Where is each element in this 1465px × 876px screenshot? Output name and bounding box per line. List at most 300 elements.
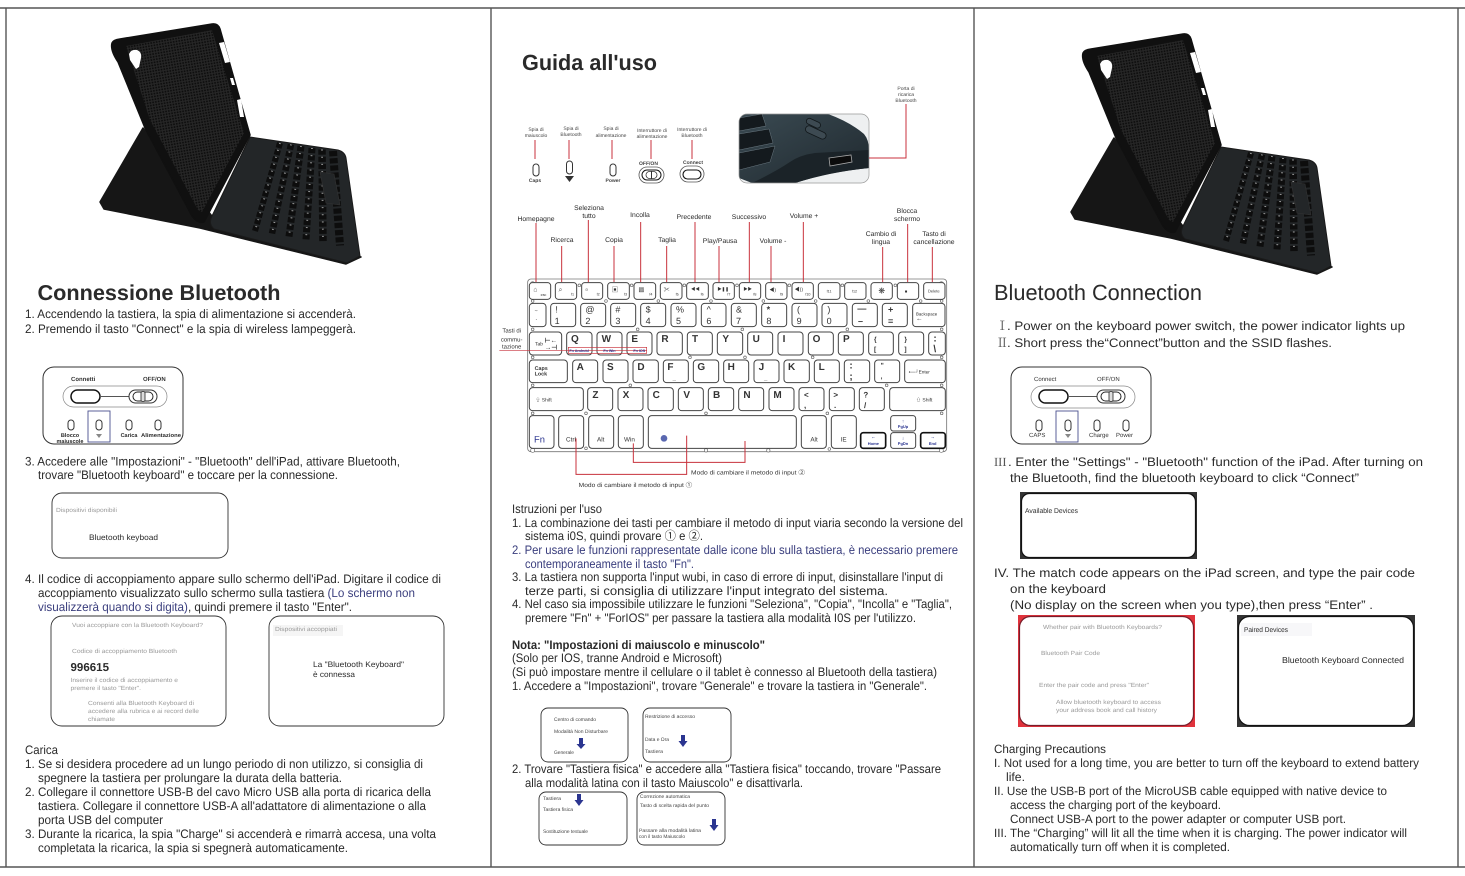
keyboard: input-switching labels: Tasti di bbox=[502, 327, 521, 334]
diagram: keyboard indicator panel: OFF/ON bbox=[1097, 376, 1120, 383]
keyboard: input method callouts: Modo di cambiare il metodo di input ② bbox=[691, 469, 805, 476]
charging instructions bbox=[25, 743, 436, 855]
keyboard diagram: * bbox=[767, 305, 770, 315]
keyboard diagram: IE bbox=[841, 436, 847, 443]
usage instructions: contemporaneamente il tasto "Fn". bbox=[525, 557, 694, 571]
screen: paired devices: è connessa bbox=[313, 670, 356, 679]
screen: physical keyboard: Tastiera bbox=[543, 796, 561, 802]
diagram: keyboard indicator panel: Blocco bbox=[61, 433, 80, 439]
keyboard diagram: [ bbox=[874, 346, 876, 353]
step 2 text: 2. Trovare "Tastiera fisica" e accedere alla "Tastiera fisica" toccando, trovare "Passare bbox=[512, 762, 941, 776]
function key callouts: Homepagne bbox=[517, 216, 555, 223]
keyboard diagram: & bbox=[736, 305, 742, 315]
keyboard diagram: ❋ bbox=[878, 286, 885, 295]
indicator: Bluetooth light: Bluetooth bbox=[560, 132, 582, 138]
step 2 text: alla modalità latina con il tasto Maiuscolo" e disattivarla. bbox=[525, 776, 803, 790]
indicator: power light bbox=[596, 126, 627, 184]
screen: pairing code: premere il tasto "Enter". bbox=[70, 685, 141, 692]
step III: the Bluetooth, find the bluetooth keyboard to click “Connect” bbox=[1010, 471, 1359, 485]
steps I and II bbox=[996, 319, 1405, 350]
keyboard diagram: ↓ bbox=[902, 435, 904, 440]
indicator: power switch: Interruttore di bbox=[637, 128, 667, 134]
keyboard diagram: End bbox=[929, 441, 936, 446]
keyboard diagram: ) bbox=[827, 305, 830, 315]
keyboard diagram: ! bbox=[555, 305, 558, 315]
keyboard diagram: Caps bbox=[535, 366, 548, 371]
note: uppercase and lowercase settings bbox=[512, 638, 937, 693]
charging precautions bbox=[994, 742, 1419, 854]
indicator: Bluetooth light bbox=[560, 126, 582, 182]
keyboard diagram: 1 bbox=[555, 316, 560, 326]
heading: Bluetooth Connection: Bluetooth Connection bbox=[994, 280, 1202, 305]
keyboard diagram: Q bbox=[571, 333, 579, 344]
panel: English Bluetooth connection bbox=[994, 34, 1423, 854]
function key callouts bbox=[517, 205, 955, 246]
charging instructions: 1. Se si desidera procedere ad un lungo periodo di non utilizzo, si consiglia di bbox=[25, 757, 423, 771]
keyboard diagram: f9 bbox=[780, 292, 783, 296]
keyboard diagram: → bbox=[930, 434, 935, 439]
keyboard diagram: A bbox=[577, 361, 584, 372]
keyboard diagram: > bbox=[833, 390, 838, 399]
callout: charging port: ricarica bbox=[898, 92, 914, 98]
keyboard diagram: / bbox=[864, 401, 866, 410]
keyboard diagram: Lock bbox=[535, 371, 547, 377]
keyboard: input-switching labels bbox=[499, 327, 647, 353]
function key callouts: cancellazione bbox=[913, 239, 955, 246]
keyboard diagram: f3 bbox=[624, 292, 627, 296]
keyboard: function row bbox=[529, 283, 945, 299]
keyboard diagram: ▫ bbox=[585, 285, 588, 294]
keyboard diagram: { bbox=[874, 336, 877, 343]
product photo: tablet keyboard case bbox=[1071, 34, 1332, 274]
usage instructions: 3. La tastiera non supporta l'input wubi, in caso di errore di input, disinstallare l'input di bbox=[512, 570, 943, 584]
keyboard diagram: L bbox=[819, 361, 825, 372]
charging precautions: access the charging port of the keyboard. bbox=[1010, 798, 1221, 812]
keyboard diagram: R bbox=[661, 333, 669, 344]
charging instructions: 2. Collegare il connettore USB-B del cavo Micro USB alla porta di ricarica della bbox=[25, 785, 431, 799]
keyboard diagram: Ctrl bbox=[566, 436, 576, 443]
function key callouts: Play/Pausa bbox=[703, 238, 737, 245]
screen: available devices: Available Devices bbox=[1025, 507, 1078, 515]
keyboard diagram: < bbox=[804, 390, 809, 399]
keyboard diagram: " bbox=[881, 362, 884, 369]
keyboard diagram: ; bbox=[849, 371, 853, 382]
charging precautions: automatically turn off when it is completed. bbox=[1010, 840, 1230, 854]
screen: physical keyboard bbox=[539, 792, 627, 845]
note: uppercase and lowercase settings: (Solo per IOS, tranne Android e Microsoft) bbox=[512, 651, 722, 665]
screen: restrictions settings: Tastiera bbox=[645, 749, 663, 755]
charging precautions: III. The “Charging” will lit all the time when it is charging. The power indicator will bbox=[994, 826, 1407, 840]
keyboard diagram: ⌂ bbox=[533, 286, 537, 293]
keyboard diagram: f11 bbox=[827, 289, 831, 293]
keyboard diagram: X bbox=[623, 389, 629, 400]
screen: paired devices: La "Bluetooth Keyboard" bbox=[313, 660, 404, 669]
screen: pairing code: chiamate bbox=[88, 716, 116, 723]
function key callouts: lingua bbox=[872, 239, 890, 246]
screen: pairing code: Inserire il codice di accoppiamento e bbox=[70, 677, 179, 684]
keyboard diagram: : bbox=[849, 360, 853, 371]
product photo: tablet keyboard case bbox=[100, 24, 361, 264]
indicator: Bluetooth switch: Interruttore di bbox=[677, 127, 707, 133]
keyboard diagram: @ bbox=[585, 305, 594, 315]
keyboard diagram: = bbox=[888, 316, 893, 326]
screen: latin mode setting: con il tasto Maiuscolo bbox=[639, 834, 685, 840]
step 4: accoppiamento visualizzato sullo schermo sulla tastiera (Lo schermo non bbox=[38, 586, 415, 600]
keyboard: input-switching labels: Fn Win bbox=[603, 349, 616, 353]
keyboard diagram: } bbox=[904, 336, 907, 343]
function key leader lines bbox=[536, 220, 932, 282]
keyboard: bottom row bbox=[529, 416, 945, 448]
indicator: Bluetooth switch: Connect bbox=[683, 160, 703, 166]
charging precautions: I. Not used for a long time, you are better to turn off the keyboard to extend battery bbox=[994, 756, 1419, 770]
keyboard diagram: f4 bbox=[649, 292, 652, 296]
step 3 bbox=[25, 454, 400, 482]
screen: restrictions settings bbox=[643, 708, 731, 762]
keyboard diagram: ^ bbox=[707, 305, 711, 315]
usage instructions bbox=[512, 502, 963, 625]
keyboard diagram: Backspace bbox=[916, 311, 937, 316]
callout: charging port: Porta di bbox=[897, 86, 915, 92]
screen: latin mode setting bbox=[637, 792, 725, 845]
screen: paired devices: Bluetooth Keyboard Connected bbox=[1282, 655, 1404, 665]
keyboard: number row bbox=[529, 303, 945, 327]
keyboard diagram: Z bbox=[592, 389, 598, 400]
keyboard diagram: _ bbox=[672, 375, 676, 381]
function key callouts: Volume - bbox=[760, 238, 786, 245]
keyboard diagram: ▶▶ bbox=[743, 287, 752, 292]
charging instructions: tastiera. Collegare il connettore USB-A all'adattatore di alimentazione o alla bbox=[38, 799, 426, 813]
keyboard diagram: W bbox=[602, 333, 611, 344]
diagram: keyboard indicator panel: Charge bbox=[1089, 432, 1109, 439]
screen: pairing code: Codice di accoppiamento Bluetooth bbox=[72, 648, 177, 655]
screen: latin mode setting: Passare alla modalità latina bbox=[639, 828, 701, 834]
step III: III bbox=[994, 455, 1006, 469]
keyboard diagram: J bbox=[759, 361, 764, 372]
keyboard diagram: Delete bbox=[928, 289, 940, 293]
screen: paired devices bbox=[1237, 615, 1415, 727]
keyboard diagram: 4 bbox=[646, 316, 651, 326]
function key callouts: schermo bbox=[894, 216, 920, 223]
keyboard diagram: . bbox=[834, 401, 836, 410]
charging instructions: Carica bbox=[25, 743, 58, 757]
keyboard diagram: ] bbox=[904, 346, 907, 353]
keyboard diagram: V bbox=[683, 389, 690, 400]
keyboard diagram: 2 bbox=[585, 316, 590, 326]
keyboard diagram bbox=[499, 220, 947, 488]
keyboard: input-switching labels: tazione bbox=[502, 343, 521, 350]
keyboard diagram: + bbox=[888, 305, 893, 315]
screen: general settings: Modalità Non Disturbare bbox=[554, 729, 608, 735]
screen: available devices bbox=[52, 493, 228, 558]
steps 1 and 2: 2. Premendo il tasto "Connect" e la spia di wireless lampeggerà. bbox=[25, 322, 356, 336]
indicator: caps light: maiuscolo bbox=[525, 133, 547, 139]
step 4: visualizzerà quando si digita), quindi premere il tasto "Enter". bbox=[38, 600, 352, 614]
steps I and II: Ⅱ bbox=[996, 336, 1009, 350]
function key callouts: Seleziona bbox=[574, 205, 604, 212]
callout: charging port bbox=[869, 86, 917, 158]
steps I and II: . Short press the“Connect”button and the SSID flashes. bbox=[1007, 336, 1332, 350]
screen: general settings: Centro di comando bbox=[554, 717, 596, 723]
keyboard diagram: ◀◀ bbox=[691, 287, 700, 292]
keyboard diagram: O bbox=[813, 333, 820, 344]
keyboard diagram: 3 bbox=[615, 316, 620, 326]
keyboard diagram: D bbox=[637, 361, 645, 372]
function key callouts: Blocca bbox=[897, 208, 917, 215]
keyboard: input-switching labels: Fn IOS bbox=[633, 349, 645, 353]
keyboard: input method callouts bbox=[576, 436, 805, 488]
photo: charging port close-up bbox=[739, 114, 869, 183]
usage instructions: sistema i0S, quindi provare ① e ②. bbox=[525, 529, 703, 543]
keyboard diagram: Win bbox=[624, 436, 635, 443]
keyboard diagram: Alt bbox=[810, 436, 818, 443]
diagram: keyboard indicator panel bbox=[1011, 367, 1151, 444]
keyboard diagram: 9 bbox=[797, 316, 802, 326]
keyboard diagram: $ bbox=[646, 305, 651, 315]
keyboard diagram: % bbox=[676, 305, 684, 315]
screen: paired devices: Dispositivi accoppiati bbox=[275, 626, 337, 633]
keyboard diagram: f2 bbox=[597, 292, 600, 296]
keyboard diagram: ▩ bbox=[638, 287, 644, 293]
screen: restrictions settings: Restrizione di accesso bbox=[645, 714, 695, 720]
screen: pair code: Whether pair with Bluetooth Keyboards? bbox=[1043, 624, 1163, 631]
keyboard diagram: H bbox=[728, 361, 735, 372]
keyboard diagram: G bbox=[697, 361, 705, 372]
keyboard diagram: ◀)) bbox=[795, 287, 803, 292]
keyboard diagram: ⊢← bbox=[545, 337, 557, 344]
steps 1 and 2 bbox=[25, 307, 356, 336]
screen: available devices: Bluetooth keyboad bbox=[89, 533, 158, 542]
note: uppercase and lowercase settings: Nota: "Impostazioni di maiuscolo e minuscolo" bbox=[512, 638, 765, 652]
keyboard: QWERTY row bbox=[529, 332, 945, 355]
keyboard diagram: # bbox=[615, 305, 620, 315]
diagram: keyboard indicator panel: OFF/ON bbox=[143, 376, 166, 383]
screen: pairing code bbox=[51, 616, 226, 726]
screen: pairing code: accedere alla rubrica e ai record delle bbox=[88, 708, 200, 715]
keyboard diagram: 6 bbox=[706, 316, 711, 326]
keyboard diagram: ⟵┘Enter bbox=[909, 369, 930, 374]
function key callouts: Cambio di bbox=[866, 231, 897, 238]
keyboard diagram: E bbox=[631, 333, 638, 344]
note: uppercase and lowercase settings: (Si può impostare mentre il cellulare o il tablet è connesso al Bluetooth della tastiera) bbox=[512, 665, 937, 679]
charging instructions: completata la ricarica, la spia si spegnerà automaticamente. bbox=[38, 841, 348, 855]
function key callouts: Precedente bbox=[677, 214, 712, 221]
indicator: Bluetooth switch: Bluetooth bbox=[681, 133, 703, 139]
screen: pair code: Bluetooth Pair Code bbox=[1041, 650, 1101, 657]
function key callouts: Taglia bbox=[658, 237, 676, 244]
indicator: power switch bbox=[637, 128, 668, 183]
screen: latin mode setting: Tasto di scelta rapida del punto bbox=[640, 803, 709, 809]
screen: pairing code: Consenti alla Bluetooth Keyboard di bbox=[88, 700, 194, 707]
keyboard diagram: P bbox=[843, 333, 850, 344]
diagram: keyboard indicator panel: maiuscole bbox=[57, 439, 83, 445]
keyboard diagram: _ bbox=[764, 375, 768, 381]
keyboard diagram: Home bbox=[868, 441, 879, 446]
keyboard diagram: ~ bbox=[535, 308, 538, 314]
keyboard diagram: ? bbox=[863, 390, 868, 399]
step IV bbox=[994, 566, 1415, 612]
indicator: Bluetooth light: Spia di bbox=[563, 126, 579, 132]
keyboard diagram: Fn bbox=[534, 434, 545, 444]
screen: pair code: Allow bluetooth keyboard to access bbox=[1056, 699, 1161, 706]
charging instructions: spegnere la tastiera per prolungare la durata della batteria. bbox=[38, 771, 342, 785]
screen: physical keyboard: Tastiera fisica bbox=[543, 807, 573, 813]
step 2 text bbox=[512, 762, 941, 790]
usage instructions: premere "Fn" + "ForIOS" per passare la tastiera alla modalità I0S per l'utilizzo. bbox=[525, 611, 916, 625]
keyboard diagram: — bbox=[857, 304, 866, 314]
keyboard diagram: ← bbox=[916, 315, 923, 322]
function key callouts: Volume + bbox=[790, 213, 818, 220]
keyboard diagram: , bbox=[881, 373, 883, 380]
keyboard diagram: ▣ bbox=[612, 286, 618, 294]
keyboard diagram: ▶❚❚ bbox=[717, 287, 729, 292]
steps 1 and 2: 1. Accendendo la tastiera, la spia di alimentazione si accenderà. bbox=[25, 307, 356, 321]
steps I and II: Ⅰ bbox=[996, 319, 1009, 333]
steps I and II: . Power on the keyboard power switch, the power indicator lights up bbox=[1007, 319, 1405, 333]
charging instructions: 3. Durante la ricarica, la spia "Charge" si accenderà e rimarrà accesa, una volta bbox=[25, 827, 436, 841]
keyboard diagram: ⇧ Shift bbox=[535, 397, 552, 403]
indicator: Bluetooth switch bbox=[677, 127, 707, 182]
keyboard diagram: Tab bbox=[535, 341, 543, 347]
keyboard diagram: f5 bbox=[676, 292, 679, 296]
keyboard diagram: PgUp bbox=[898, 424, 908, 429]
keyboard diagram: 5 bbox=[676, 316, 681, 326]
screen: paired devices: Paired Devices bbox=[1244, 626, 1288, 634]
keyboard diagram: f12 bbox=[852, 289, 857, 293]
keyboard diagram: f8 bbox=[753, 292, 756, 296]
keyboard diagram: PgDn bbox=[898, 441, 908, 446]
diagram: keyboard indicator panel: CAPS bbox=[1029, 432, 1045, 439]
step 3: trovare "Bluetooth keyboard" e toccare per la connessione. bbox=[38, 468, 338, 482]
screen: pairing code: 996615 bbox=[70, 662, 110, 674]
keyboard diagram: Alt bbox=[597, 436, 605, 443]
screen: available devices bbox=[1020, 492, 1197, 559]
note: uppercase and lowercase settings: 1. Accedere a "Impostazioni", trovare "Generale" e trovare la tastiera in "Generale". bbox=[512, 679, 927, 693]
charging precautions: life. bbox=[1006, 770, 1025, 784]
screen: pair code: Enter the pair code and press "Enter" bbox=[1039, 682, 1149, 689]
keyboard diagram: Y bbox=[722, 333, 729, 344]
keyboard diagram: M bbox=[773, 389, 782, 400]
screen: general settings bbox=[541, 708, 628, 762]
keyboard diagram: T bbox=[692, 333, 698, 344]
keyboard diagram: ← bbox=[871, 434, 876, 439]
keyboard diagram: U bbox=[753, 333, 760, 344]
keyboard diagram: : bbox=[933, 333, 937, 344]
keyboard diagram: S bbox=[607, 361, 614, 372]
keyboard diagram: C bbox=[653, 389, 660, 400]
indicator: caps light: Spia di bbox=[528, 127, 544, 133]
function key callouts: Tasto di bbox=[922, 231, 946, 238]
usage instructions: terze parti, si consiglia di utilizzare l'input integrato del sistema. bbox=[525, 584, 888, 598]
step 4: 4. Il codice di accoppiamento appare sullo schermo dell'iPad. Digitare il codice di bbox=[25, 572, 441, 586]
step 4 bbox=[25, 572, 441, 614]
indicator: power light: Power bbox=[605, 178, 621, 184]
indicator: caps light bbox=[525, 127, 547, 184]
keyboard: ASDF row bbox=[529, 360, 945, 383]
keyboard diagram: ▪ bbox=[905, 287, 908, 296]
screen: pairing code: Vuoi accoppiare con la Bluetooth Keyboard? bbox=[72, 622, 204, 629]
keyboard diagram: esc bbox=[541, 293, 547, 297]
usage instructions: 1. La combinazione dei tasti per cambiare il metodo di input viaria secondo la versione del bbox=[512, 516, 963, 530]
keyboard diagram: – bbox=[858, 316, 863, 326]
panel: Italian Bluetooth connection bbox=[25, 24, 444, 855]
charging precautions: Charging Precautions bbox=[994, 742, 1106, 756]
indicator: power switch: OFF/ON bbox=[639, 161, 658, 167]
indicator: power switch: alimentazione bbox=[637, 134, 668, 140]
indicator: caps light: Caps bbox=[529, 178, 541, 184]
keyboard diagram: F bbox=[667, 361, 673, 372]
keyboard diagram: f7 bbox=[727, 292, 730, 296]
screen: pair code bbox=[1018, 615, 1195, 727]
keyboard diagram: ✂ bbox=[664, 286, 670, 293]
diagram: keyboard indicator panel: Carica bbox=[121, 433, 138, 439]
heading: Guida all'uso: Guida all'uso bbox=[522, 50, 657, 75]
diagram: keyboard indicator panel bbox=[43, 367, 183, 445]
function key callouts: Copia bbox=[605, 237, 623, 244]
keyboard diagram: I bbox=[783, 333, 785, 344]
keyboard diagram: 8 bbox=[766, 316, 771, 326]
usage instructions: 2. Per usare le funzioni rappresentate dalle icone blu sulla tastiera, è necessario premere bbox=[512, 543, 958, 557]
step IV: on the keyboard bbox=[1010, 582, 1106, 596]
diagram: keyboard indicator panel: Connetti bbox=[71, 376, 96, 383]
keyboard diagram: ↑ bbox=[902, 418, 904, 424]
screen: pair code: your address book and call history bbox=[1056, 707, 1157, 714]
keyboard diagram: 0 bbox=[827, 316, 832, 326]
keyboard: ZXCV row bbox=[529, 388, 945, 411]
charging precautions: Connect USB-A port to the power adapter or computer USB port. bbox=[1010, 812, 1346, 826]
panel: Italian usage guide bbox=[499, 50, 963, 845]
keyboard diagram: ` bbox=[535, 318, 537, 325]
keyboard: input-switching labels: commu- bbox=[501, 336, 523, 343]
keyboard diagram: K bbox=[788, 361, 795, 372]
usage instructions: 4. Nel caso sia impossibile utilizzare le funzioni "Seleziona", "Copia", "Incolla" e "Taglia", bbox=[512, 597, 952, 611]
keyboard diagram: f10 bbox=[805, 292, 810, 296]
keyboard diagram: B bbox=[713, 389, 720, 400]
keyboard diagram: ⌕ bbox=[559, 286, 562, 293]
diagram: keyboard indicator panel: Power bbox=[1116, 432, 1133, 439]
keyboard diagram: N bbox=[743, 389, 751, 400]
screen: paired devices bbox=[269, 616, 444, 726]
screen: restrictions settings: Data e Ora bbox=[645, 737, 669, 743]
usage instructions: Istruzioni per l'uso bbox=[512, 502, 602, 516]
screen: latin mode setting: Correzione automatica bbox=[640, 794, 690, 800]
step 3: 3. Accedere alle "Impostazioni" - "Bluetooth" dell'iPad, attivare Bluetooth, bbox=[25, 454, 400, 468]
indicator: power light: alimentazione bbox=[596, 133, 627, 139]
screen: physical keyboard: Sostituzione testuale bbox=[543, 829, 588, 835]
step III: . Enter the "Settings" - "Bluetooth" function of the iPad. After turning on bbox=[1008, 455, 1423, 469]
charging instructions: porta USB del computer bbox=[38, 813, 163, 827]
step IV: (No display on the screen when you type),then press “Enter” . bbox=[1010, 598, 1373, 612]
keyboard diagram: \ bbox=[933, 343, 936, 354]
keyboard: input method callouts: Modo di cambiare il metodo di input ① bbox=[579, 482, 692, 488]
screen: general settings: Generale bbox=[554, 750, 574, 756]
keyboard diagram: f1 bbox=[571, 292, 574, 296]
function key callouts: Incolla bbox=[630, 212, 650, 219]
keyboard: input-switching labels: Fn Android bbox=[569, 349, 589, 353]
screen: available devices: Dispositivi disponibili bbox=[56, 507, 117, 514]
keyboard diagram: →⊣ bbox=[545, 344, 557, 351]
indicator: power light: Spia di bbox=[603, 126, 619, 132]
charging precautions: II. Use the USB-B port of the MicroUSB cable equipped with native device to bbox=[994, 784, 1387, 798]
function key callouts: Successivo bbox=[732, 214, 766, 221]
keyboard diagram: 7 bbox=[736, 316, 741, 326]
callout: charging port: Bluetooth bbox=[895, 98, 917, 104]
keyboard diagram: , bbox=[804, 401, 806, 410]
keyboard diagram: ◀) bbox=[769, 287, 776, 293]
step III bbox=[994, 455, 1423, 485]
diagram: keyboard indicator panel: Connect bbox=[1034, 376, 1057, 383]
keyboard diagram: ( bbox=[797, 305, 800, 315]
diagram: keyboard indicator panel: Alimentazione bbox=[141, 433, 181, 439]
